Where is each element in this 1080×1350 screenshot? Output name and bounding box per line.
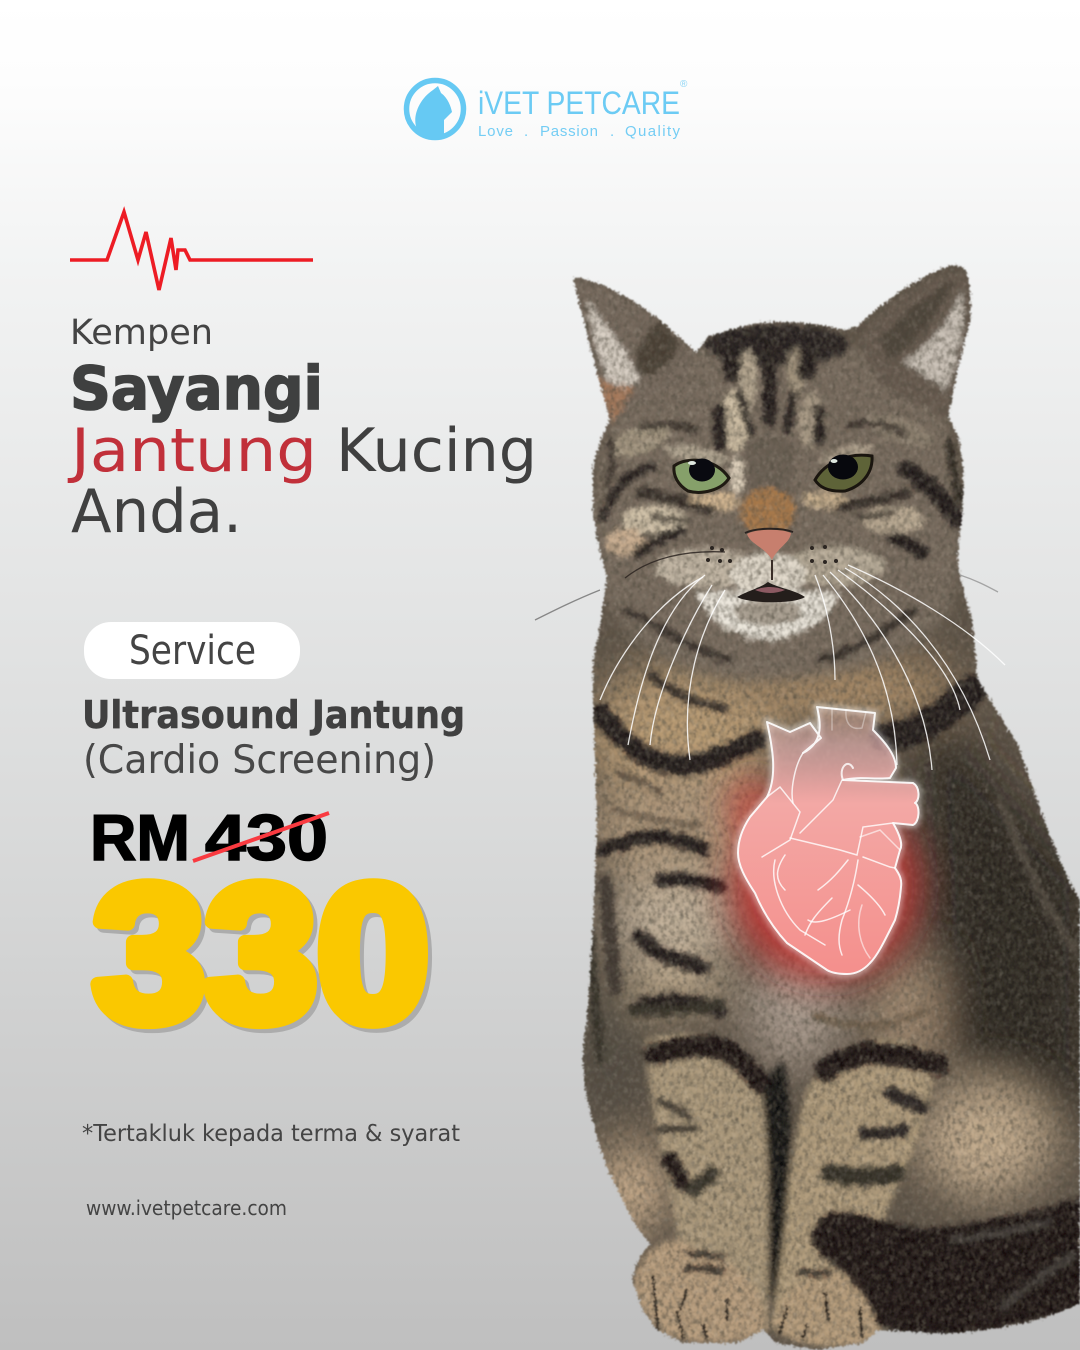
whisker pad dots — [706, 545, 838, 564]
tagline — [478, 123, 680, 140]
tagline: Love — [478, 123, 513, 140]
heart glow — [714, 773, 938, 997]
old price with strike-through — [90, 801, 329, 874]
service pill: Service — [129, 628, 256, 674]
old price with strike-through: 430 — [205, 801, 328, 874]
service pill — [84, 622, 300, 679]
left eye — [674, 458, 729, 492]
cat nose and mouth — [737, 529, 805, 602]
kicker: Kempen — [70, 313, 213, 353]
forehead and cheek stripes — [603, 345, 960, 660]
tail — [811, 1195, 1080, 1340]
left paw and right paw — [634, 1240, 880, 1347]
title: Kempen Sayangi Jantung Kucing Anda — [67, 313, 537, 547]
front legs — [645, 1034, 935, 1330]
head base — [592, 328, 962, 680]
heart body — [738, 707, 919, 974]
service name: Ultrasound Jantung — [82, 693, 465, 737]
forehead — [705, 325, 849, 365]
new price 330: 330 — [97, 849, 433, 1065]
neck and body stripes — [590, 675, 1075, 1060]
headline line 3: Anda. — [71, 477, 242, 547]
terms note: *Tertakluk kepada terma & syarat — [82, 1121, 460, 1147]
headline line 2 — [67, 416, 537, 486]
headline line 2: Jantung — [67, 416, 317, 486]
cat eyes — [674, 454, 872, 492]
new price 330: 330 — [93, 845, 429, 1061]
face tones — [746, 436, 796, 534]
right eye — [815, 454, 872, 491]
registered mark: ® — [680, 79, 688, 90]
tagline: Passion — [540, 123, 598, 140]
headline line 1: Sayangi — [70, 354, 323, 424]
tagline: Quality — [625, 123, 680, 140]
tagline: . — [610, 123, 614, 140]
heart vessels — [762, 708, 900, 958]
heart outer halo — [738, 707, 919, 974]
front leg stripes — [633, 1003, 937, 1273]
logo: iVET PETCARE — [406, 79, 688, 140]
website: www.ivetpetcare.com — [86, 1196, 287, 1220]
tagline: . — [524, 123, 528, 140]
tabby cat illustration — [520, 240, 1080, 1350]
whiskers — [535, 552, 1005, 770]
old price with strike-through: RM — [90, 801, 190, 874]
headline line 2: Kucing — [336, 416, 537, 486]
paw toes — [653, 1277, 862, 1338]
brand name: iVET PETCARE — [478, 85, 680, 121]
ears — [574, 278, 686, 386]
anatomical heart — [738, 707, 919, 974]
icon: heartbeat line — [70, 212, 313, 290]
fur grain — [560, 260, 1080, 1350]
service name: (Cardio Screening) — [83, 738, 436, 783]
cat fur and markings — [572, 262, 1080, 1350]
service name — [82, 693, 465, 783]
fur highlights — [560, 260, 1080, 1350]
icon: cat in ring — [406, 80, 464, 138]
